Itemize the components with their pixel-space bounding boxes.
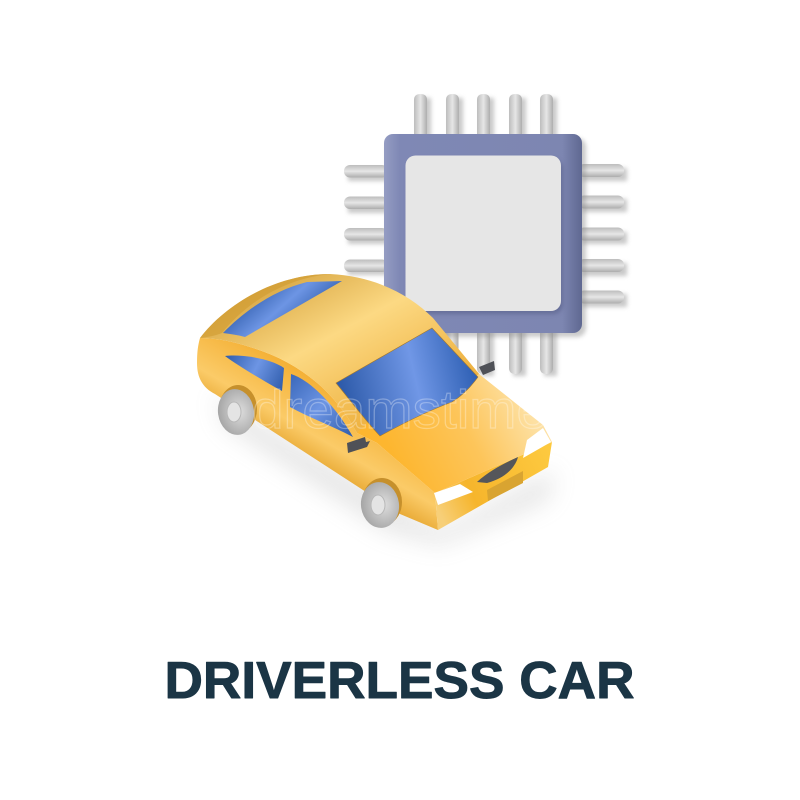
left headlight (434, 484, 473, 505)
chip body shadow (387, 138, 586, 337)
chip pins bottom (446, 330, 553, 374)
car side window front (290, 374, 353, 437)
car far mirror (479, 361, 495, 375)
car near mirror (347, 437, 370, 453)
tyre (215, 387, 257, 437)
chip die (406, 156, 561, 311)
chip body (384, 134, 582, 333)
chip die shadow (408, 159, 563, 314)
car side body (197, 338, 438, 530)
icon: driverless car (197, 274, 555, 545)
arch (219, 385, 257, 433)
grille (477, 457, 518, 483)
watermark: dreamstime (252, 380, 548, 440)
chip pins top (414, 94, 553, 136)
car roof (200, 274, 480, 433)
icon: processor chip (344, 94, 627, 376)
car hood (357, 374, 552, 493)
number plate (487, 471, 523, 501)
right headlight (523, 428, 551, 458)
tyre (358, 480, 402, 530)
arch (362, 478, 402, 526)
car rear window (223, 281, 342, 337)
car roof left shade (200, 274, 330, 338)
car ground shadow (215, 395, 555, 545)
hub (371, 495, 385, 515)
front wheel (358, 478, 402, 530)
title: DRIVERLESS CAR (164, 652, 634, 710)
chip pin shadows (348, 98, 627, 376)
car side window rear (225, 356, 284, 391)
hub (227, 402, 241, 422)
rear wheel (215, 385, 257, 437)
car windshield (336, 328, 478, 436)
car front face (435, 442, 552, 530)
chip pins left (344, 165, 388, 272)
chip pins right (578, 164, 624, 304)
